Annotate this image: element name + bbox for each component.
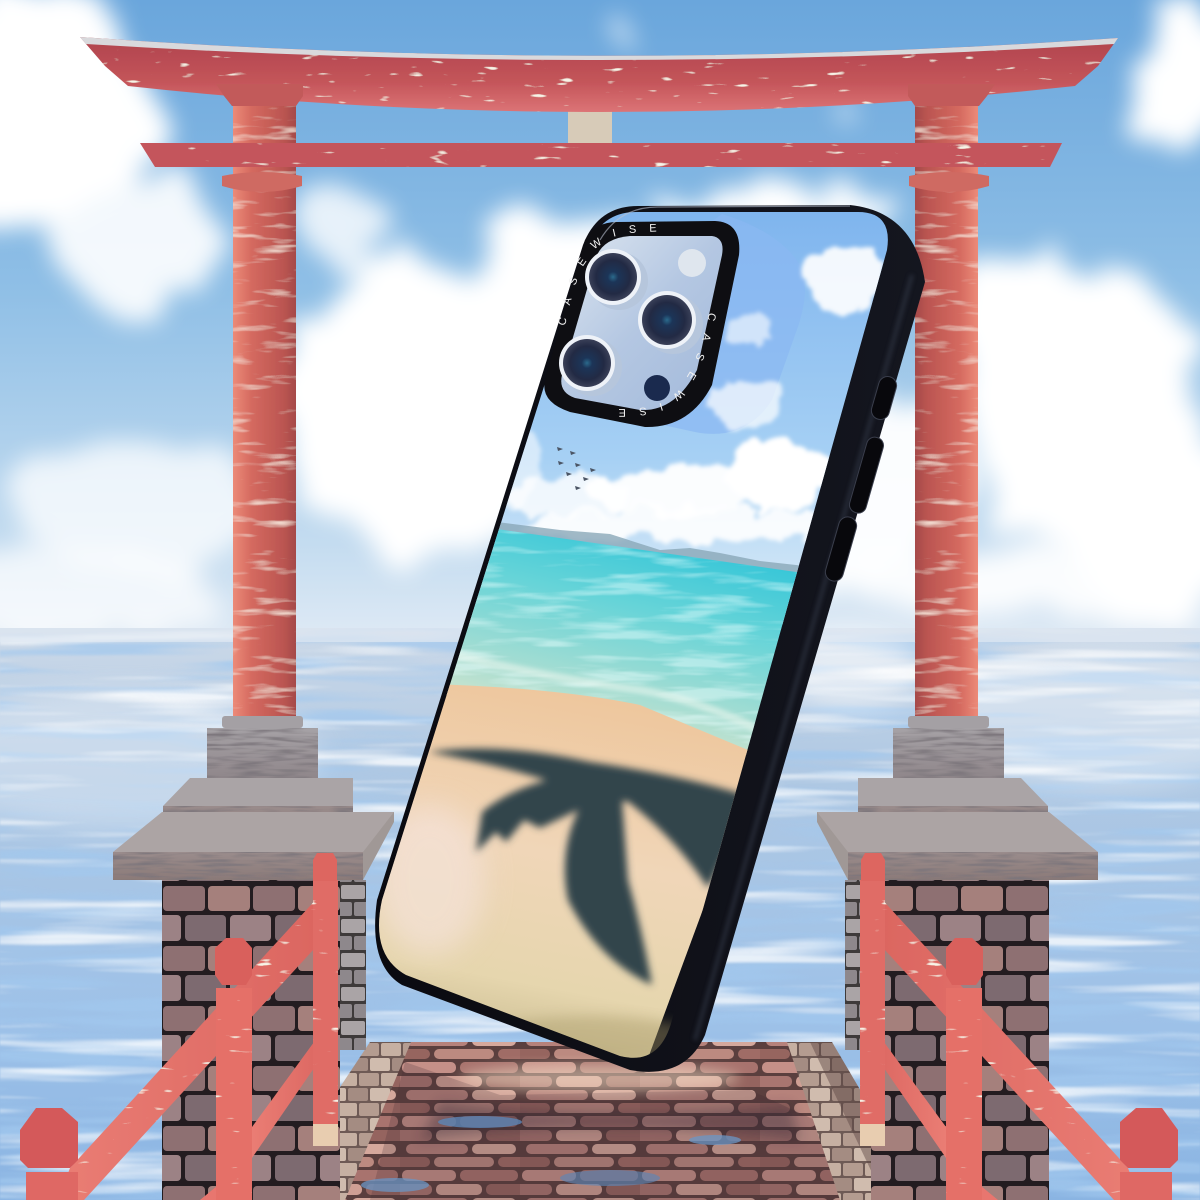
brand text: upper left of ring: CASEWISE (558, 224, 656, 325)
palm tree shadow (428, 749, 745, 985)
left railing (20, 853, 338, 1200)
lens: bottom (559, 335, 622, 396)
artwork sea (446, 529, 797, 755)
torii lower beam (140, 143, 1062, 167)
artwork clouds (480, 248, 887, 541)
side buttons (823, 374, 899, 583)
lens: top (585, 249, 648, 310)
blurred foreground sand (522, 1013, 672, 1058)
flash (678, 249, 706, 277)
phone case (375, 205, 925, 1072)
side frame highlight (695, 275, 912, 1040)
stone bridge floor (265, 1042, 925, 1200)
sea foam (455, 655, 770, 735)
lens: middle (638, 291, 703, 354)
case artwork: beach (360, 205, 900, 1080)
sand left haze (375, 805, 485, 955)
torii top beam (80, 37, 1118, 112)
artwork translucent panel (664, 340, 792, 434)
sea (0, 628, 1200, 1200)
camera bumper ring (544, 221, 739, 427)
glass reflection on top edge (600, 206, 850, 240)
left torii pillar and stone base (113, 100, 394, 1200)
brand text: lower right of ring: CASEWISE (619, 314, 716, 417)
right railing (860, 853, 1178, 1200)
sea ripples (447, 530, 797, 744)
camera plate (561, 236, 723, 410)
clouds behind the gate (0, 0, 1200, 630)
camera module (544, 221, 740, 427)
artwork sand (379, 684, 748, 1058)
sky (0, 0, 1200, 640)
phone frame (375, 205, 925, 1072)
birds (557, 447, 596, 490)
right torii pillar and stone base (817, 100, 1098, 1200)
sensor (644, 375, 670, 401)
artwork sky (468, 212, 888, 625)
left top collar (216, 84, 303, 106)
distant islands (497, 522, 805, 578)
torii strut (568, 104, 612, 144)
right top collar (908, 84, 995, 106)
